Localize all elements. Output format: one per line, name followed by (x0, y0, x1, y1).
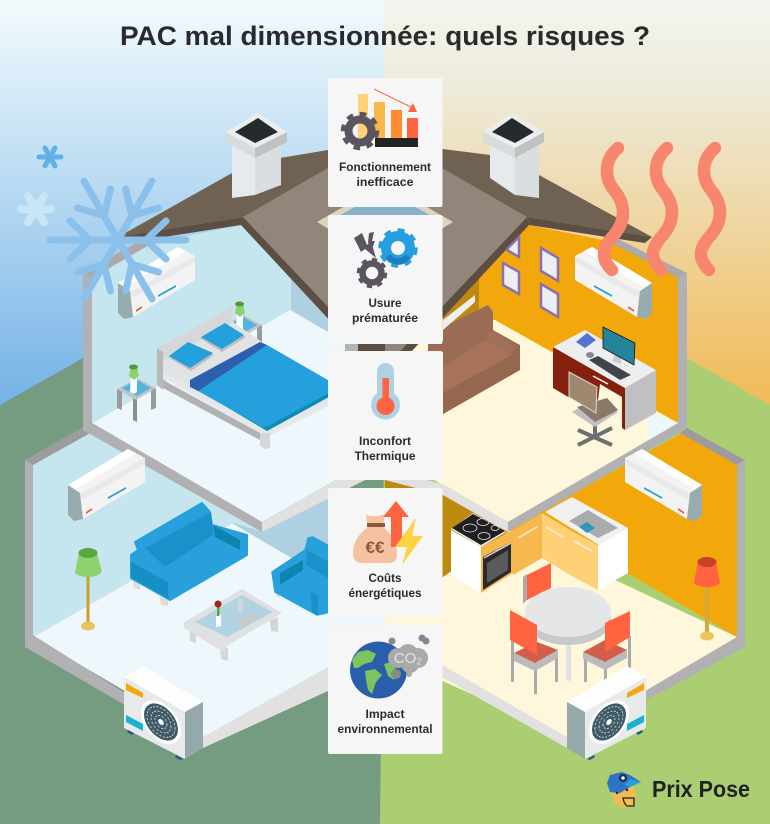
chimney: left (226, 113, 287, 198)
outdoor unit: right (567, 666, 646, 760)
label: Fonctionnement (339, 160, 431, 174)
lower left room shell (25, 427, 385, 748)
blue sofa (131, 503, 247, 606)
panel: fonctionnement inefficace (328, 78, 442, 207)
snowflake: large (50, 172, 186, 308)
logo: Prix Pose (607, 772, 750, 808)
label: Inconfort (359, 434, 411, 448)
blue armchair (272, 537, 340, 615)
upper right room shell (385, 225, 687, 532)
label: énergétiques (348, 586, 422, 600)
icon: falling bars and gear (343, 89, 418, 148)
air conditioner: upper left (118, 247, 195, 319)
nightstand with lamp: front (117, 364, 156, 422)
label: Thermique (354, 449, 416, 463)
title: PAC mal dimensionnée: quels risques ? (120, 21, 650, 51)
wall shelf (443, 295, 475, 330)
heat waves (604, 148, 720, 270)
bed (157, 307, 340, 449)
dining table and chairs (510, 563, 631, 694)
label: prématurée (352, 311, 418, 325)
icon: worn gears (354, 230, 416, 286)
coffee table (184, 589, 282, 661)
panel: usure prématurée (328, 215, 442, 344)
background: warm side sky (384, 0, 770, 420)
icon: thermometer (371, 363, 400, 420)
roof (118, 135, 652, 380)
label: inefficace (356, 175, 414, 189)
label: Usure (368, 296, 402, 310)
panel: coûts énergétiques (328, 488, 442, 617)
desk with computer (553, 327, 656, 445)
floor lamp: red (694, 557, 720, 640)
air conditioner: lower right (625, 449, 702, 521)
air conditioner: lower left (68, 449, 145, 521)
air conditioner: upper right (575, 247, 652, 319)
upper left room shell (25, 225, 385, 532)
icon: mascot head with cap (607, 772, 641, 808)
lower right room shell (385, 428, 745, 748)
wall frames (503, 237, 558, 317)
label: Coûts (368, 571, 402, 585)
snowflake: small blue (39, 148, 61, 166)
snowflake: small pale (21, 196, 51, 222)
kitchen (451, 497, 628, 593)
background: cold side ground (0, 358, 385, 824)
nightstand with lamp: back (223, 302, 262, 359)
background: cold side sky (0, 0, 384, 420)
floor lamp: green (75, 548, 102, 630)
brown sofa (443, 305, 520, 414)
icon: globe and CO2 cloud: CO₂ (394, 650, 422, 667)
label: environnemental (338, 722, 432, 736)
wordmark: Prix Pose (652, 776, 750, 802)
background: warm side ground (380, 358, 770, 824)
chimney: right (483, 113, 544, 198)
icon: money bag, arrow and lightning: €€ (366, 538, 385, 557)
label: Impact (366, 707, 404, 721)
outdoor unit: left (124, 666, 203, 760)
panel: inconfort thermique (328, 351, 442, 480)
panel: impact environnemental (328, 625, 442, 754)
